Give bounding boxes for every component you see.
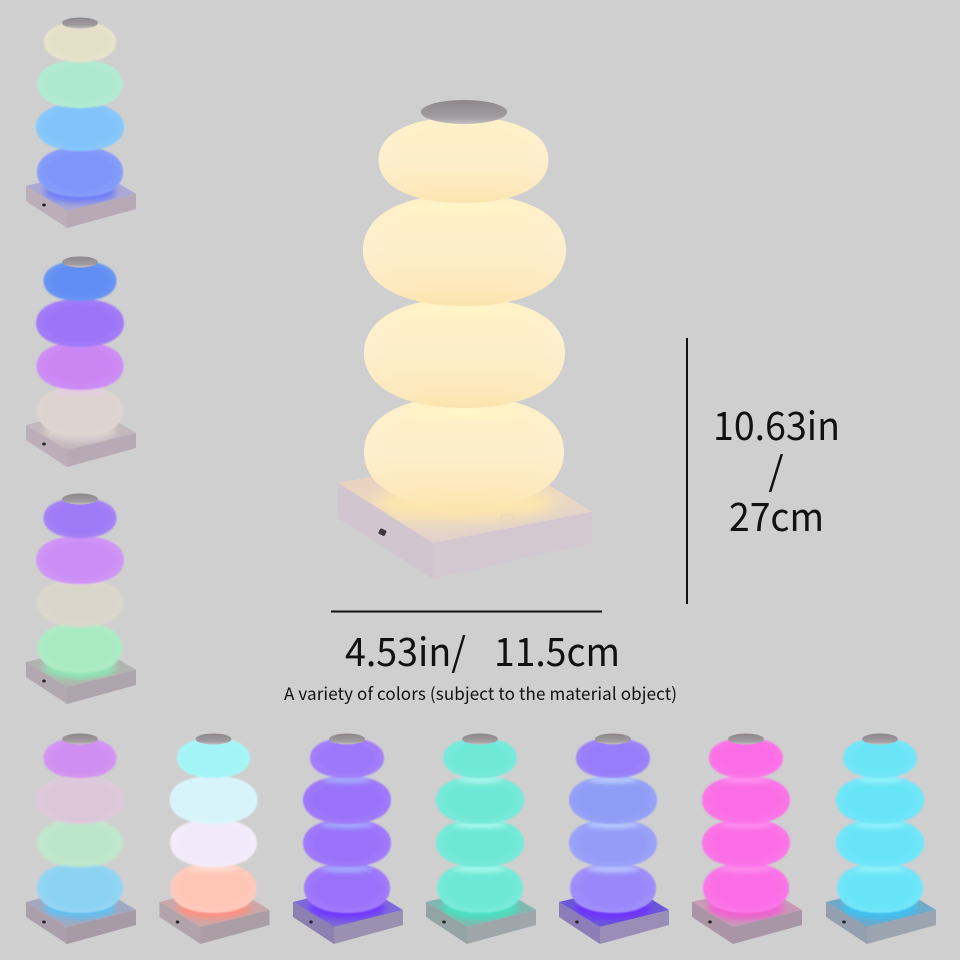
touch button: [500, 514, 514, 522]
small lamp: bottom row 7: [826, 734, 936, 944]
third globe: [364, 298, 565, 408]
height label: 10.63in: [713, 396, 840, 452]
small lamp: bottom row 5: [559, 734, 669, 944]
small lamp: bottom row 6: [692, 734, 802, 944]
height label: [713, 396, 840, 543]
USB port: [378, 528, 387, 536]
small lamp: bottom row 2: [160, 734, 270, 944]
lower globe: [364, 396, 564, 508]
width dimension line: [331, 610, 602, 612]
small lamp: bottom row 1: [26, 734, 136, 944]
second globe: [363, 194, 566, 306]
colour note caption: A variety of colors (subject to the material object): [284, 680, 677, 705]
height label: /: [768, 441, 784, 497]
height dimension line: [686, 338, 688, 604]
small lamp: left column 2: [26, 256, 136, 467]
main warm white lamp: [338, 100, 592, 579]
top globe: [378, 117, 548, 203]
width label: [345, 622, 620, 678]
small lamp: bottom row 4: [426, 734, 536, 944]
width label: 4.53in/: [345, 622, 466, 678]
metal cap: [421, 100, 507, 124]
small lamp: bottom row 3: [293, 734, 403, 944]
small lamp: left column 3: [26, 494, 136, 704]
lamp base: [338, 476, 592, 578]
width label: 11.5cm: [494, 622, 620, 678]
small lamp: left column 1: [26, 18, 136, 228]
height label: 27cm: [729, 487, 824, 543]
